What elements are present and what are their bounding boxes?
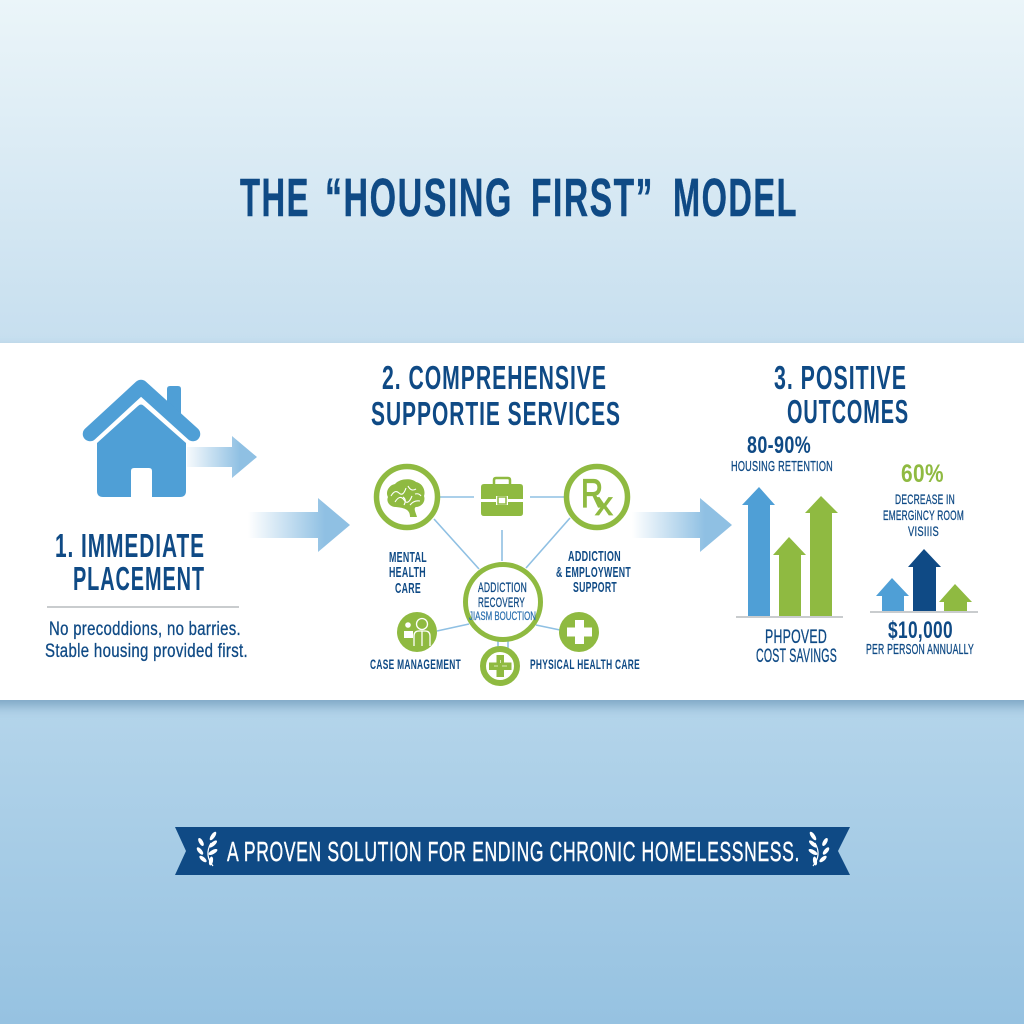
icon: addiction recovery hub: [466, 564, 540, 640]
heading: immediate placement: 1. IMMEDIATE: [55, 527, 205, 564]
label: mental health care: HEALTH: [389, 564, 426, 581]
stat: emergency room decrease: [883, 460, 964, 539]
stat: emergency room decrease: 60%: [901, 460, 944, 488]
text: placement description: No precoddions, no barries.: [49, 619, 241, 640]
icon: prescription circle: x: [595, 485, 614, 522]
heading: comprehensive supportive services: [371, 359, 621, 432]
heading: comprehensive supportive services: SUPPORTIE SERVICES: [371, 395, 621, 432]
label: case management: CASE MANAGEMENT: [370, 656, 461, 672]
stat: housing retention: 80-90%: [747, 432, 811, 459]
text: placement description: [45, 619, 248, 662]
stat: cost savings per person: [866, 617, 974, 658]
title: “HOUSING: [325, 168, 513, 228]
arrow: step 2 to step 3: [632, 498, 732, 552]
stat: cost savings per person: $10,000: [888, 617, 953, 644]
icon: right laurel: [808, 831, 830, 866]
panel: step 2 supportive services: [370, 359, 640, 683]
stat: housing retention: [731, 432, 833, 475]
arrow: house to placement: [187, 436, 257, 478]
label: addiction and employment support: ADDICTION: [568, 548, 621, 565]
icon: addiction recovery hub: RECOVERY: [478, 594, 525, 610]
heading: comprehensive supportive services: 2. COMPREHENSIVE: [382, 359, 607, 396]
label: mental health care: MENTAL: [389, 549, 427, 566]
icon: prescription circle: R: [581, 472, 603, 516]
label: improved cost savings: COST SAVINGS: [756, 646, 837, 667]
label: mental health care: [389, 549, 427, 597]
heading: immediate placement: PLACEMENT: [73, 560, 205, 597]
label: improved cost savings: PHPOVED: [765, 627, 827, 648]
stat: emergency room decrease: VISIIIS: [908, 523, 939, 539]
icon: house: [90, 386, 193, 497]
label: addiction and employment support: [556, 548, 631, 596]
icon: case management: [397, 612, 437, 652]
label: physical health care: PHYSICAL HEALTH CARE: [530, 656, 640, 672]
banner: [175, 827, 850, 875]
icon: prescription circle: [566, 466, 628, 528]
text: placement description: Stable housing provided first.: [45, 641, 248, 662]
title: MODEL: [673, 168, 798, 228]
stat: emergency room decrease: DECREASE IN: [895, 491, 955, 507]
heading: positive outcomes: 3. POSITIVE: [774, 359, 907, 396]
icon: left laurel: [196, 831, 218, 866]
heading: positive outcomes: [774, 359, 909, 430]
label: mental health care: CARE: [395, 580, 421, 597]
icon: addiction recovery hub: ADDICTION: [478, 579, 527, 595]
icon: briefcase: [481, 478, 523, 516]
stat: emergency room decrease: EMERGiNCY ROOM: [883, 507, 964, 523]
title: THE: [240, 168, 310, 228]
label: addiction and employment support: SUPPORT: [573, 579, 617, 596]
icon: brain in circle: [376, 466, 438, 528]
panel: white model band: [0, 343, 1024, 706]
chart: large growth arrows: [736, 487, 843, 618]
panel: step 1 immediate placement: [45, 386, 257, 662]
heading: positive outcomes: OUTCOMES: [787, 393, 909, 430]
icon: medical plus: [483, 649, 517, 683]
title: [240, 168, 798, 228]
label: addiction and employment support: & EMPLOYWENT: [556, 564, 631, 581]
stat: housing retention: HOUSING RETENTION: [731, 459, 833, 475]
panel: step 3 positive outcomes: [731, 359, 978, 667]
arrow: step 1 to step 2: [248, 498, 350, 552]
label: improved cost savings: [756, 627, 837, 667]
chart: small growth arrows: [870, 549, 978, 613]
title: FIRST”: [531, 168, 654, 228]
icon: physical health plus: [559, 612, 599, 652]
icon: addiction recovery hub: JIASM BOUCTION: [469, 609, 536, 623]
heading: immediate placement: [55, 527, 205, 597]
